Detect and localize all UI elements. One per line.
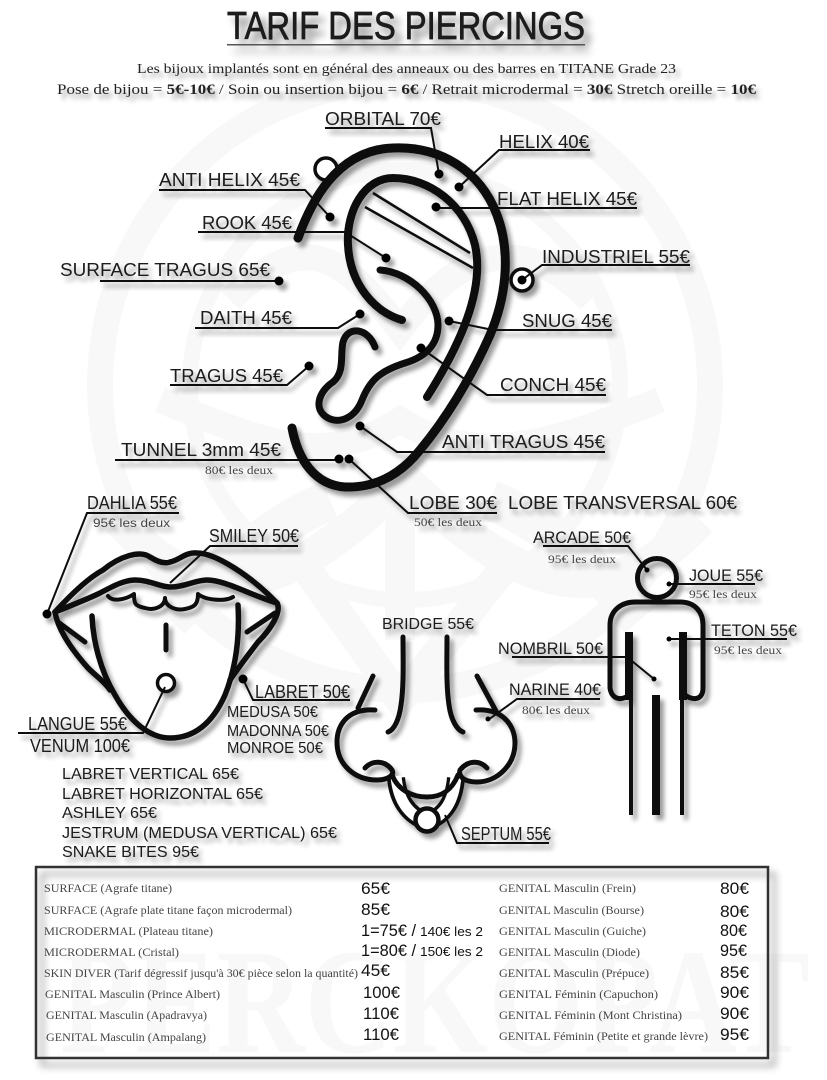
intro text: Pose de bijou = 5€-10€ / Soin ou insertion bijou = 6€ / Retrait microdermal = 30€ Stretch oreille = 10€ (57, 82, 757, 98)
list: labret variants: MONROE 50€ (227, 740, 323, 757)
table right column: 90€ (720, 1004, 750, 1023)
label: dahlia: DAHLIA 55€ (87, 493, 177, 513)
table right column: 90€ (720, 983, 750, 1002)
table left column: GENITAL Masculin (Apadravya) (46, 1010, 207, 1022)
label: langue and venum: LANGUE 55€ (28, 714, 127, 734)
label: daith (195, 308, 364, 328)
label: lobe (344, 454, 497, 529)
table right column (499, 879, 750, 1044)
ear diagram (60, 109, 737, 529)
label: joue: JOUE 55€ (689, 566, 764, 585)
label: anti tragus: ANTI TRAGUS 45€ (442, 432, 605, 452)
label: teton: TETON 55€ (711, 621, 798, 640)
label: septum (445, 815, 551, 844)
label: tunnel (115, 440, 344, 477)
label: flat helix: FLAT HELIX 45€ (497, 189, 637, 209)
list: lip piercings: JESTRUM (MEDUSA VERTICAL) 65€ (62, 825, 337, 842)
label: tragus: TRAGUS 45€ (170, 366, 283, 386)
list: labret variants: MADONNA 50€ (227, 723, 329, 740)
table right column: GENITAL Féminin (Petite et grande lèvre) (499, 1031, 708, 1043)
table right column: GENITAL Féminin (Capuchon) (499, 989, 658, 1001)
table left column: 140€ les 2 (420, 924, 483, 939)
table left column: 110€ (363, 1004, 400, 1023)
label: rook (198, 213, 390, 262)
table left column: 110€ (363, 1025, 400, 1044)
list: labret variants (227, 704, 329, 757)
table left column: 65€ (361, 879, 391, 898)
label: helix (454, 132, 590, 192)
table left column: 1=80€ / (361, 941, 416, 960)
ear outline (292, 148, 533, 487)
label: labret (238, 674, 350, 702)
title: TARIF DES PIERCINGS (227, 5, 585, 48)
table right column: GENITAL Masculin (Prépuce) (499, 968, 649, 980)
table left column: 150€ les 2 (420, 944, 483, 959)
table left column: GENITAL Masculin (Ampalang) (46, 1032, 206, 1044)
label: orbital (325, 109, 444, 178)
table frame (36, 867, 768, 1058)
table left column: 100€ (363, 983, 401, 1002)
label: orbital: ORBITAL 70€ (325, 109, 441, 129)
table right column: GENITAL Masculin (Bourse) (499, 905, 644, 917)
nose diagram (337, 616, 602, 844)
label: rook: ROOK 45€ (202, 213, 292, 233)
label: teton: 95€ les deux (714, 645, 782, 657)
label: joue (666, 566, 764, 601)
table left column (44, 879, 483, 1044)
label: snug (444, 311, 612, 331)
label: narine: 80€ les deux (522, 705, 590, 717)
table right column: GENITAL Féminin (Mont Christina) (499, 1010, 682, 1022)
label: septum: SEPTUM 55€ (461, 824, 551, 844)
list: lip piercings: LABRET HORIZONTAL 65€ (62, 786, 263, 803)
table right column: 80€ (720, 921, 748, 940)
table left column: SKIN DIVER (Tarif dégressif jusqu'à 30€ pièce selon la quantité) (44, 968, 358, 980)
label: langue and venum: VENUM 100€ (30, 736, 130, 756)
label: snug: SNUG 45€ (522, 311, 612, 331)
table right column: 80€ (720, 879, 750, 898)
label: narine: NARINE 40€ (509, 680, 602, 699)
table left column: MICRODERMAL (Plateau titane) (44, 926, 213, 938)
label: daith: DAITH 45€ (200, 308, 292, 328)
table right column: 95€ (720, 941, 748, 960)
list: lip piercings: ASHLEY 65€ (62, 805, 157, 822)
label: industriel: INDUSTRIEL 55€ (542, 247, 690, 267)
table right column: 85€ (720, 963, 750, 982)
intro text: Les bijoux implantés sont en général des anneaux ou des barres en TITANE Grade 23 (137, 62, 676, 77)
label: anti helix (159, 170, 334, 222)
list: lip piercings (62, 766, 337, 861)
label: conch: CONCH 45€ (500, 375, 606, 395)
label: flat helix (432, 189, 637, 212)
panel: price table (36, 867, 768, 1058)
body diagram (498, 528, 798, 815)
watermark: tribal emblem (100, 80, 710, 700)
label: dahlia (42, 493, 179, 618)
label: lobe: 50€ les deux (414, 517, 482, 529)
label: lobe transversal: LOBE TRANSVERSAL 60€ (508, 493, 737, 513)
mouth diagram (18, 493, 350, 861)
table right column: 95€ (720, 1025, 750, 1044)
label: tragus (170, 362, 314, 386)
label: dahlia: 95€ les deux (93, 516, 170, 530)
label: anti helix: ANTI HELIX 45€ (159, 170, 300, 190)
label: helix: HELIX 40€ (499, 132, 589, 152)
list: lip piercings: SNAKE BITES 95€ (62, 844, 199, 861)
table left column: 45€ (361, 961, 391, 980)
label: joue: 95€ les deux (689, 589, 757, 601)
label: teton (666, 621, 798, 657)
label: tunnel: TUNNEL 3mm 45€ (121, 440, 281, 460)
mouth outline (55, 553, 278, 738)
list: lip piercings: LABRET VERTICAL 65€ (62, 766, 239, 783)
label: arcade: ARCADE 50€ (533, 528, 632, 547)
table right column: GENITAL Masculin (Diode) (499, 947, 640, 959)
label: smiley: SMILEY 50€ (209, 526, 299, 546)
nose outline (337, 637, 515, 832)
body outline (610, 558, 703, 815)
label: conch (416, 344, 606, 395)
label: lobe: LOBE 30€ (409, 493, 497, 513)
table left column: MICRODERMAL (Cristal) (44, 947, 179, 959)
label: arcade: 95€ les deux (548, 554, 616, 566)
table left column: GENITAL Masculin (Prince Albert) (45, 989, 220, 1001)
table right column: GENITAL Masculin (Guiche) (499, 926, 646, 938)
label: surface tragus: SURFACE TRAGUS 65€ (60, 260, 270, 280)
label: tunnel: 80€ les deux (205, 465, 273, 477)
label: nombril (498, 639, 656, 682)
label: labret: LABRET 50€ (255, 682, 350, 702)
table right column: 80€ (720, 902, 750, 921)
label: nombril: NOMBRIL 50€ (498, 639, 604, 658)
list: labret variants: MEDUSA 50€ (227, 704, 318, 721)
table left column: 1=75€ / (361, 921, 416, 940)
intro text (57, 62, 757, 98)
label: langue and venum (18, 687, 165, 756)
table left column: 85€ (361, 900, 391, 919)
label: anti tragus (356, 422, 605, 452)
label: narine (486, 680, 602, 722)
label: arcade (533, 528, 650, 572)
table right column: GENITAL Masculin (Frein) (499, 883, 636, 895)
label: smiley (170, 526, 299, 583)
label: industriel (518, 247, 690, 284)
table left column: SURFACE (Agrafe plate titane façon microdermal) (44, 905, 292, 917)
table left column: SURFACE (Agrafe titane) (44, 883, 172, 895)
label: bridge: BRIDGE 55€ (382, 616, 474, 633)
